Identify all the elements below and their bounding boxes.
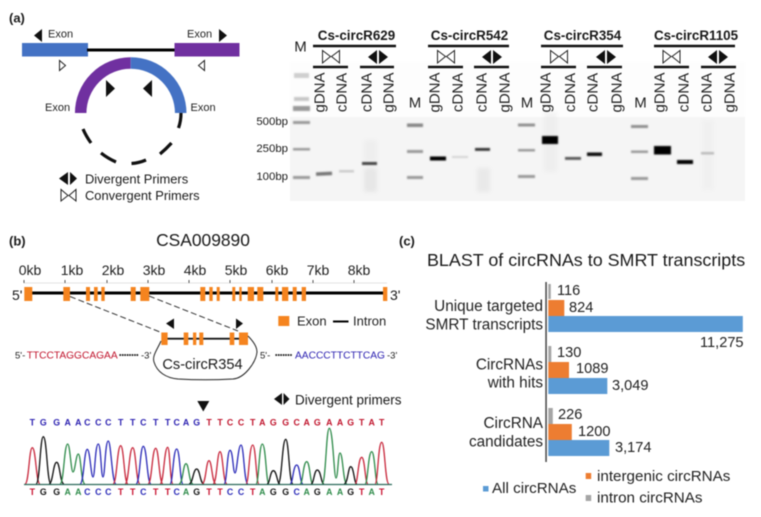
base calls bottom: A: [183, 487, 190, 497]
value labels: [557, 283, 744, 456]
base calls bottom: A: [259, 487, 266, 497]
value labels: 824: [569, 300, 593, 316]
dashed intron circle: [83, 113, 181, 164]
dashed zoom lines: [70, 296, 238, 332]
circular exon arc: [81, 63, 181, 113]
right junction sequence: 5'-: [260, 350, 270, 362]
left exon label with divergent primer: Exon: [48, 28, 73, 40]
base calls bottom: A: [326, 487, 333, 497]
legend: All circRNAs: [492, 480, 577, 497]
ladder bands: [293, 73, 648, 180]
circular junction exon model: [161, 332, 248, 345]
legend: exon and intron: [278, 314, 386, 328]
lane group: Cs-circR1105: Cs-circR1105: [654, 28, 739, 43]
kilobase axis: 7kb: [307, 262, 329, 278]
marker labels: M: [634, 94, 647, 112]
category labels: with hits: [487, 374, 543, 392]
legend: convergent primers: Convergent Primers: [85, 188, 200, 203]
linear gene with two exons: [22, 43, 240, 56]
lane group: Cs-circR542: gDNA: [496, 72, 514, 113]
bars: [548, 284, 743, 456]
marker labels: M: [409, 94, 421, 112]
circR354 loop outline: [154, 336, 257, 380]
label Cs-circR354: Cs-circR354: [162, 357, 243, 373]
size labels: 250bp: [256, 143, 288, 155]
lane group: Cs-circR542: cDNA: [474, 73, 490, 112]
circle exon label left: Exon: [45, 102, 70, 114]
left junction sequence: [15, 350, 151, 362]
lane group: Cs-circR354: cDNA: [562, 73, 579, 112]
marker labels: M: [521, 94, 533, 112]
base calls bottom: G: [270, 487, 277, 497]
value labels: 11,275: [700, 335, 744, 351]
category labels: [425, 298, 544, 450]
legend: intergenic circRNAs: [597, 468, 731, 485]
panel: gene structure CSA009890: [9, 230, 402, 497]
marker labels: M: [294, 38, 307, 56]
lane group: Cs-circR1105: cDNA: [676, 73, 692, 112]
kilobase axis: 4kb: [184, 262, 206, 278]
lane group: Cs-circR542: cDNA: [450, 73, 466, 112]
5 prime label: 5': [12, 287, 22, 303]
lane group: Cs-circR1105: gDNA: [652, 72, 668, 113]
lane group: Cs-circR629: Cs-circR629: [318, 28, 395, 43]
gel background: [290, 62, 745, 201]
base calls bottom: T: [359, 487, 365, 497]
chromatogram trace: [24, 428, 392, 484]
lane group: Cs-circR542: [426, 28, 514, 113]
right exon label with divergent primer: [187, 28, 227, 42]
base calls bottom: T: [250, 487, 256, 497]
base calls bottom: T: [30, 487, 36, 497]
legend: exon and intron: Intron: [353, 314, 386, 328]
size labels: 500bp: [256, 116, 288, 128]
lane group: Cs-circR629: cDNA: [358, 73, 376, 112]
lane group: Cs-circR354: gDNA: [538, 72, 554, 113]
value labels: 226: [558, 407, 582, 423]
left junction sequence: -3': [141, 350, 151, 362]
base calls bottom: T: [217, 487, 223, 497]
lane group: Cs-circR629: cDNA: [334, 73, 350, 112]
right junction sequence: [260, 350, 397, 362]
lane group: Cs-circR354: Cs-circR354: [544, 28, 622, 43]
value labels: 116: [557, 283, 580, 299]
base calls bottom: C: [294, 487, 301, 497]
right junction sequence: AACCCTTCTTCAG: [295, 350, 385, 362]
base calls bottom: A: [369, 487, 376, 497]
marker labels: [294, 38, 647, 112]
lane group: Cs-circR354: gDNA: [608, 72, 626, 113]
base calls bottom: C: [140, 487, 147, 497]
lane group: Cs-circR354: cDNA: [584, 73, 602, 112]
base calls bottom: G: [193, 487, 200, 497]
junction marker arrow: [197, 401, 209, 412]
base calls bottom: G: [282, 487, 289, 497]
kilobase axis: 8kb: [348, 262, 370, 278]
called sequence top: TGGAACCCTTCTTCAG: [30, 418, 200, 428]
base calls bottom: C: [84, 487, 91, 497]
icon: inner divergent primers: [106, 80, 152, 97]
kilobase axis: 1kb: [61, 262, 83, 278]
gene model with exons: [24, 287, 387, 301]
kilobase axis: [19, 262, 387, 283]
category labels: SMRT transcripts: [425, 316, 543, 334]
base calls bottom: A: [304, 487, 311, 497]
category labels: Unique targeted: [434, 298, 543, 315]
base calls bottom: T: [118, 487, 124, 497]
value labels: 1200: [578, 424, 610, 440]
category labels: CircRNA: [484, 415, 544, 432]
base calls bottom: C: [238, 487, 245, 497]
left exon label with divergent primer: [34, 28, 73, 42]
circle exon label right: Exon: [190, 102, 216, 114]
panel: circRNA primer schematic: [9, 10, 240, 203]
icon: circR354 divergent primers: [166, 318, 243, 329]
base calls bottom: C: [174, 487, 181, 497]
base calls bottom: G: [347, 487, 354, 497]
base calls bottom: T: [153, 487, 159, 497]
panel label c: (c): [399, 234, 415, 248]
lane group: Cs-circR542: Cs-circR542: [431, 28, 508, 43]
base calls bottom: G: [40, 487, 47, 497]
lane group: Cs-circR1105: [652, 28, 739, 113]
kilobase axis: 0kb: [19, 262, 41, 278]
kilobase axis: 2kb: [102, 262, 124, 278]
left junction sequence: ••••••••: [119, 352, 139, 360]
right exon label with divergent primer: Exon: [187, 28, 212, 40]
kilobase axis: 3kb: [143, 262, 165, 278]
category labels: CircRNAs: [476, 356, 543, 374]
lane group: Cs-circR629: gDNA: [312, 72, 328, 113]
lane group: Cs-circR1105: gDNA: [722, 72, 738, 113]
kilobase axis: 5kb: [225, 262, 247, 278]
base calls bottom: A: [65, 487, 72, 497]
size labels: 100bp: [256, 171, 288, 183]
axis: [545, 282, 547, 462]
base calls bottom: C: [227, 487, 234, 497]
panel label a: (a): [9, 10, 25, 26]
called sequence top: TTCCTAGGCAGAAGTAT: [206, 418, 385, 428]
value labels: 3,174: [615, 440, 652, 456]
base calls bottom: C: [105, 487, 112, 497]
base calls bottom: G: [53, 487, 60, 497]
legend: intron circRNAs: [597, 490, 703, 506]
gene title: CSA009890: [156, 230, 250, 250]
icon: hollow convergent primer left: [60, 60, 66, 70]
chart title: BLAST of circRNAs to SMRT transcripts: [427, 250, 745, 270]
lane group: Cs-circR354: [538, 28, 626, 113]
base calls bottom: G: [314, 487, 321, 497]
lane group: Cs-circR1105: cDNA: [698, 73, 716, 112]
icon: hollow convergent primer right: [198, 60, 204, 70]
right junction sequence: -3': [387, 350, 397, 362]
legend: exon and intron: Exon: [297, 314, 327, 328]
base calls bottom: T: [206, 487, 212, 497]
right junction sequence: •••••••: [275, 352, 293, 360]
size labels: [256, 116, 288, 183]
sample bands: [316, 136, 714, 176]
base calls bottom: A: [75, 487, 82, 497]
base calls bottom: T: [130, 487, 136, 497]
legend: [483, 468, 731, 506]
lane group: Cs-circR542: gDNA: [426, 72, 444, 113]
legend: divergent primers: Divergent Primers: [85, 172, 188, 186]
category labels: candidates: [469, 434, 543, 450]
kilobase axis: 6kb: [266, 262, 288, 278]
3 prime label: 3': [390, 287, 400, 303]
value labels: 1089: [576, 361, 608, 377]
value labels: 130: [557, 345, 581, 361]
smears: [364, 112, 714, 192]
left junction sequence: 5'-: [15, 350, 25, 362]
base calls bottom: T: [379, 487, 385, 497]
base calls bottom: T: [165, 487, 171, 497]
left junction sequence: TTCCTAGGCAGAA: [27, 350, 118, 362]
legend: divergent primers: Divergent primers: [295, 392, 402, 408]
panel label b: (b): [9, 234, 26, 248]
lane group: Cs-circR629: [312, 28, 398, 113]
base calls bottom: C: [95, 487, 102, 497]
panel: gel electrophoresis: [256, 28, 745, 201]
lane group: Cs-circR629: gDNA: [380, 72, 398, 113]
base calls bottom: A: [337, 487, 344, 497]
panel: BLAST bar chart: [399, 234, 745, 506]
value labels: 3,049: [612, 378, 649, 394]
